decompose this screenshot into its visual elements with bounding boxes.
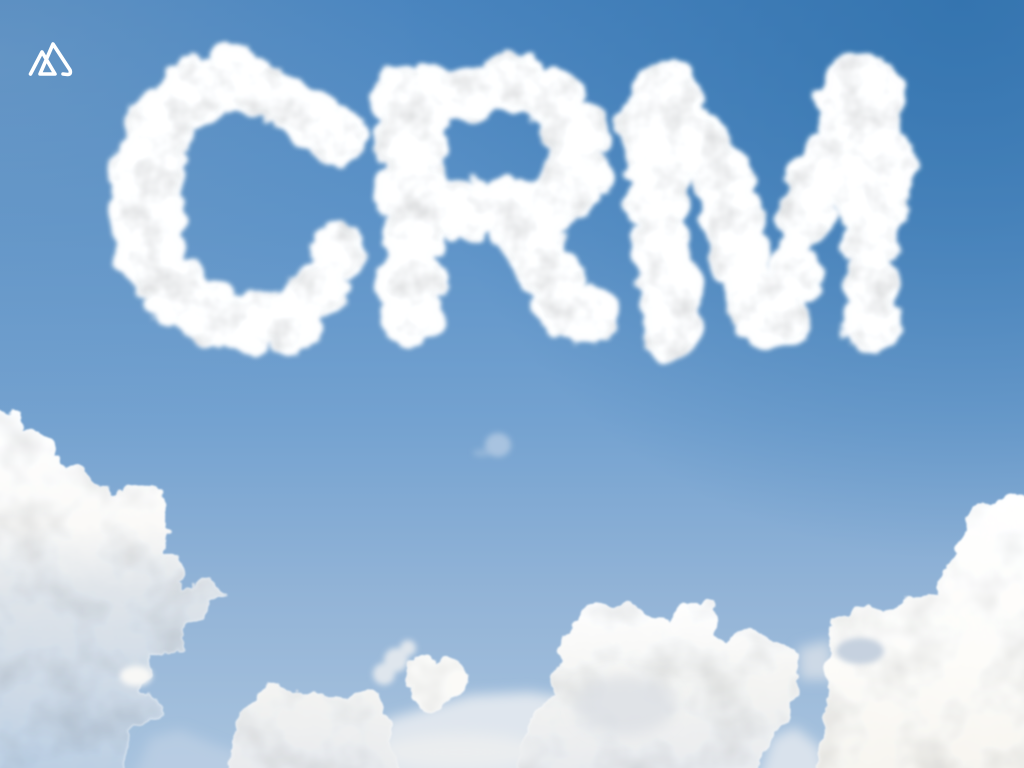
icon: white mountain logo — [30, 44, 70, 74]
letter C: C — [113, 1, 360, 396]
cloud lettering: CRM — [109, 0, 916, 415]
grey shadow on right cloud — [836, 638, 884, 664]
letter M: M — [616, 0, 911, 415]
large cloud: bottom left — [0, 410, 225, 768]
hazy puffs beside centre peak — [373, 640, 416, 685]
centre cloud shading — [380, 675, 675, 768]
haze at foot of clouds — [130, 640, 835, 768]
letter R: R — [367, 0, 601, 415]
small wisp of cloud — [473, 433, 511, 457]
clouds: bottom centre — [225, 602, 798, 768]
large cloud: bottom right — [815, 495, 1024, 768]
bright puff on left cloud — [120, 666, 152, 686]
